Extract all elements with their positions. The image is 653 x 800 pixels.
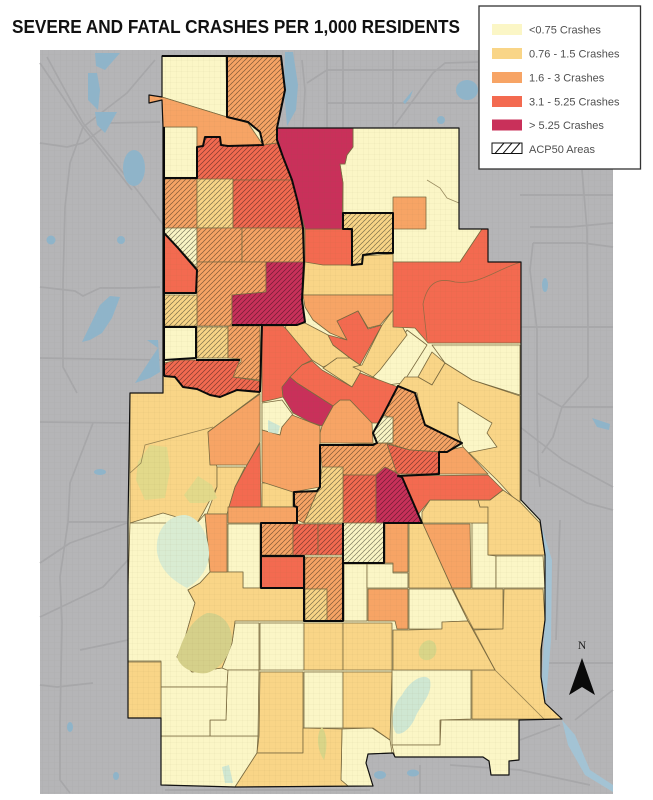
legend item: 0.76 to 1.5 crashes: 0.76 - 1.5 Crashes — [529, 48, 620, 60]
lakes and parks inside the city — [136, 420, 436, 783]
legend item: 3.1 to 5.25 crashes — [492, 96, 620, 108]
icon: north arrow: N — [578, 640, 587, 652]
street grid over the city — [128, 56, 562, 787]
legend item: ACP50 areas — [492, 143, 596, 156]
city outline — [128, 56, 562, 787]
legend item: above 5.25 crashes: > 5.25 Crashes — [529, 120, 604, 132]
title: SEVERE AND FATAL CRASHES PER 1,000 RESIDENTS — [12, 17, 460, 37]
legend item: 0.76 to 1.5 crashes — [492, 48, 620, 60]
legend item: under 0.75 crashes — [492, 24, 601, 36]
legend item: ACP50 areas: ACP50 Areas — [529, 144, 596, 156]
legend item: 3.1 to 5.25 crashes: 3.1 - 5.25 Crashes — [529, 96, 620, 108]
legend — [479, 6, 640, 169]
neighborhoods: base city fill — [128, 56, 562, 787]
legend item: under 0.75 crashes: <0.75 Crashes — [529, 24, 601, 36]
legend item: 1.6 to 3 crashes — [492, 72, 605, 84]
legend item: above 5.25 crashes — [492, 120, 604, 132]
class: 0.76 to 1.5 crashes — [128, 254, 562, 787]
highways and rail inside the city — [130, 180, 545, 720]
class: under 0.75 crashes — [128, 56, 545, 787]
legend item: 1.6 to 3 crashes: 1.6 - 3 Crashes — [529, 72, 605, 84]
ACP50 hatched areas — [164, 57, 462, 621]
ACP50 boundaries — [162, 56, 462, 621]
class: 3.1 to 5.25 crashes — [164, 229, 521, 588]
class: 1.6 to 3 crashes — [149, 95, 488, 629]
class: above 5.25 crashes — [277, 128, 353, 426]
icon: north arrow — [569, 640, 595, 695]
